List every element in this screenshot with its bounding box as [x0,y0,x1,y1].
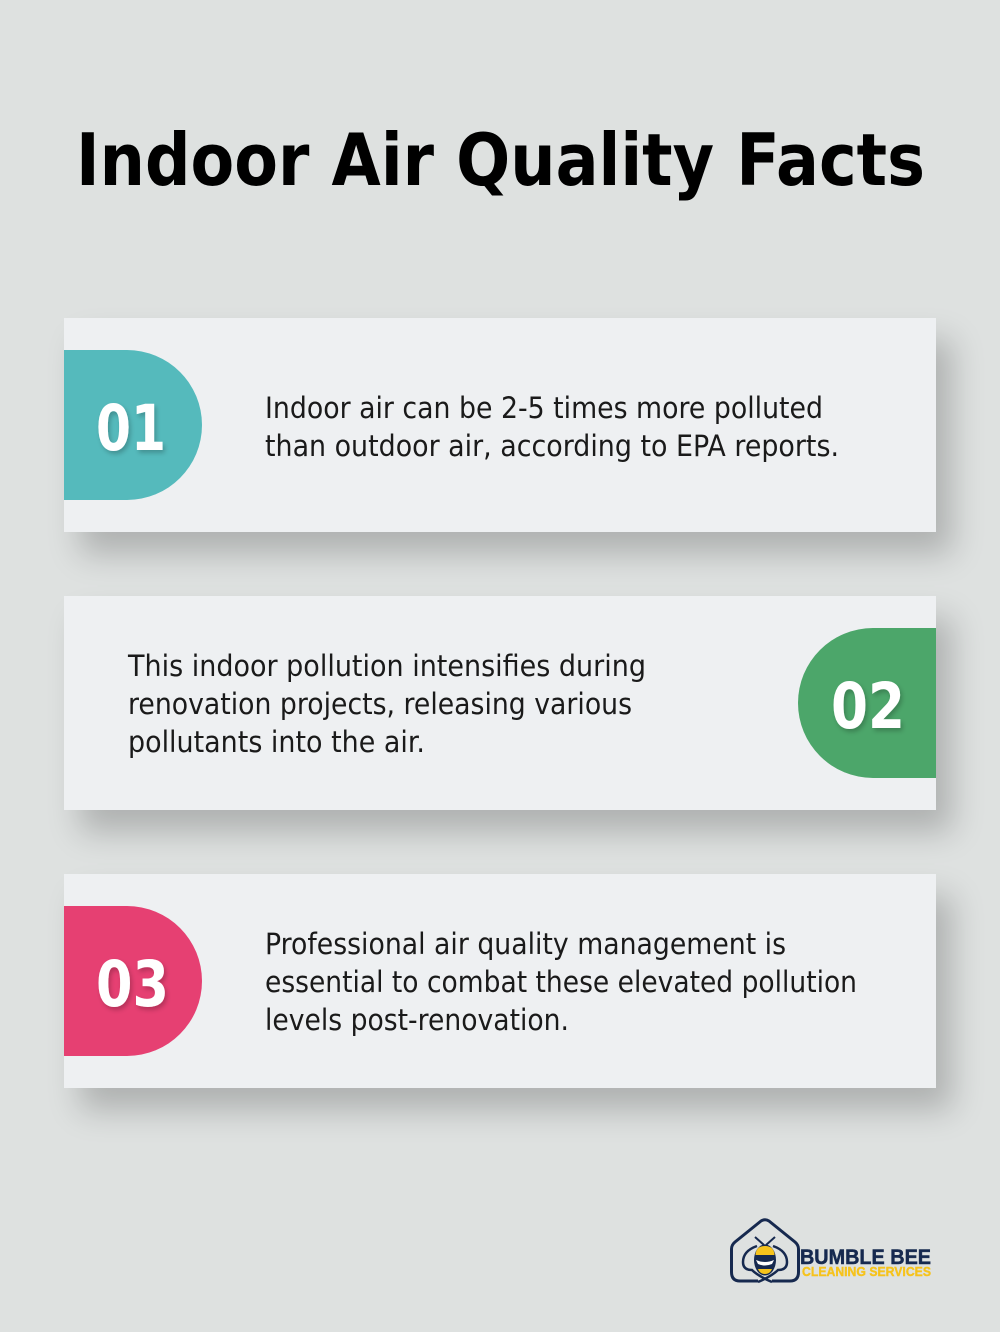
panel: fact 1 card [64,318,936,532]
number 01: 01 [96,392,166,465]
logo wordmark: BUMBLE BEE [800,1246,931,1269]
number 02: 02 [831,670,905,743]
panel: fact 2 card [64,596,936,810]
number 03: 03 [96,948,169,1021]
fact 3 text: levels post-renovation. [265,1003,569,1037]
logo: Bumble Bee Cleaning Services [732,1220,931,1282]
fact 2 text: renovation projects, releasing various [128,687,632,721]
fact 2 text: pollutants into the air. [128,725,425,759]
badge: 02 [798,628,936,778]
fact 1 text: than outdoor air, according to EPA reports. [265,429,839,463]
logo tagline: CLEANING SERVICES [802,1264,931,1279]
badge: 03 [64,906,202,1056]
fact 3 text: Professional air quality management is [265,927,786,961]
icon: bee [743,1237,787,1282]
fact 3 text [265,927,857,1037]
fact 2 text [127,649,646,759]
badge: 01 [64,350,202,500]
icon: house outline [732,1220,798,1281]
fact 2 text: This indoor pollution intensifies during [127,649,646,683]
fact 1 text [265,391,839,463]
fact 3 text: essential to combat these elevated pollution [265,965,857,999]
panel: fact 3 card [64,874,936,1088]
fact 1 text: Indoor air can be 2-5 times more polluted [265,391,823,425]
